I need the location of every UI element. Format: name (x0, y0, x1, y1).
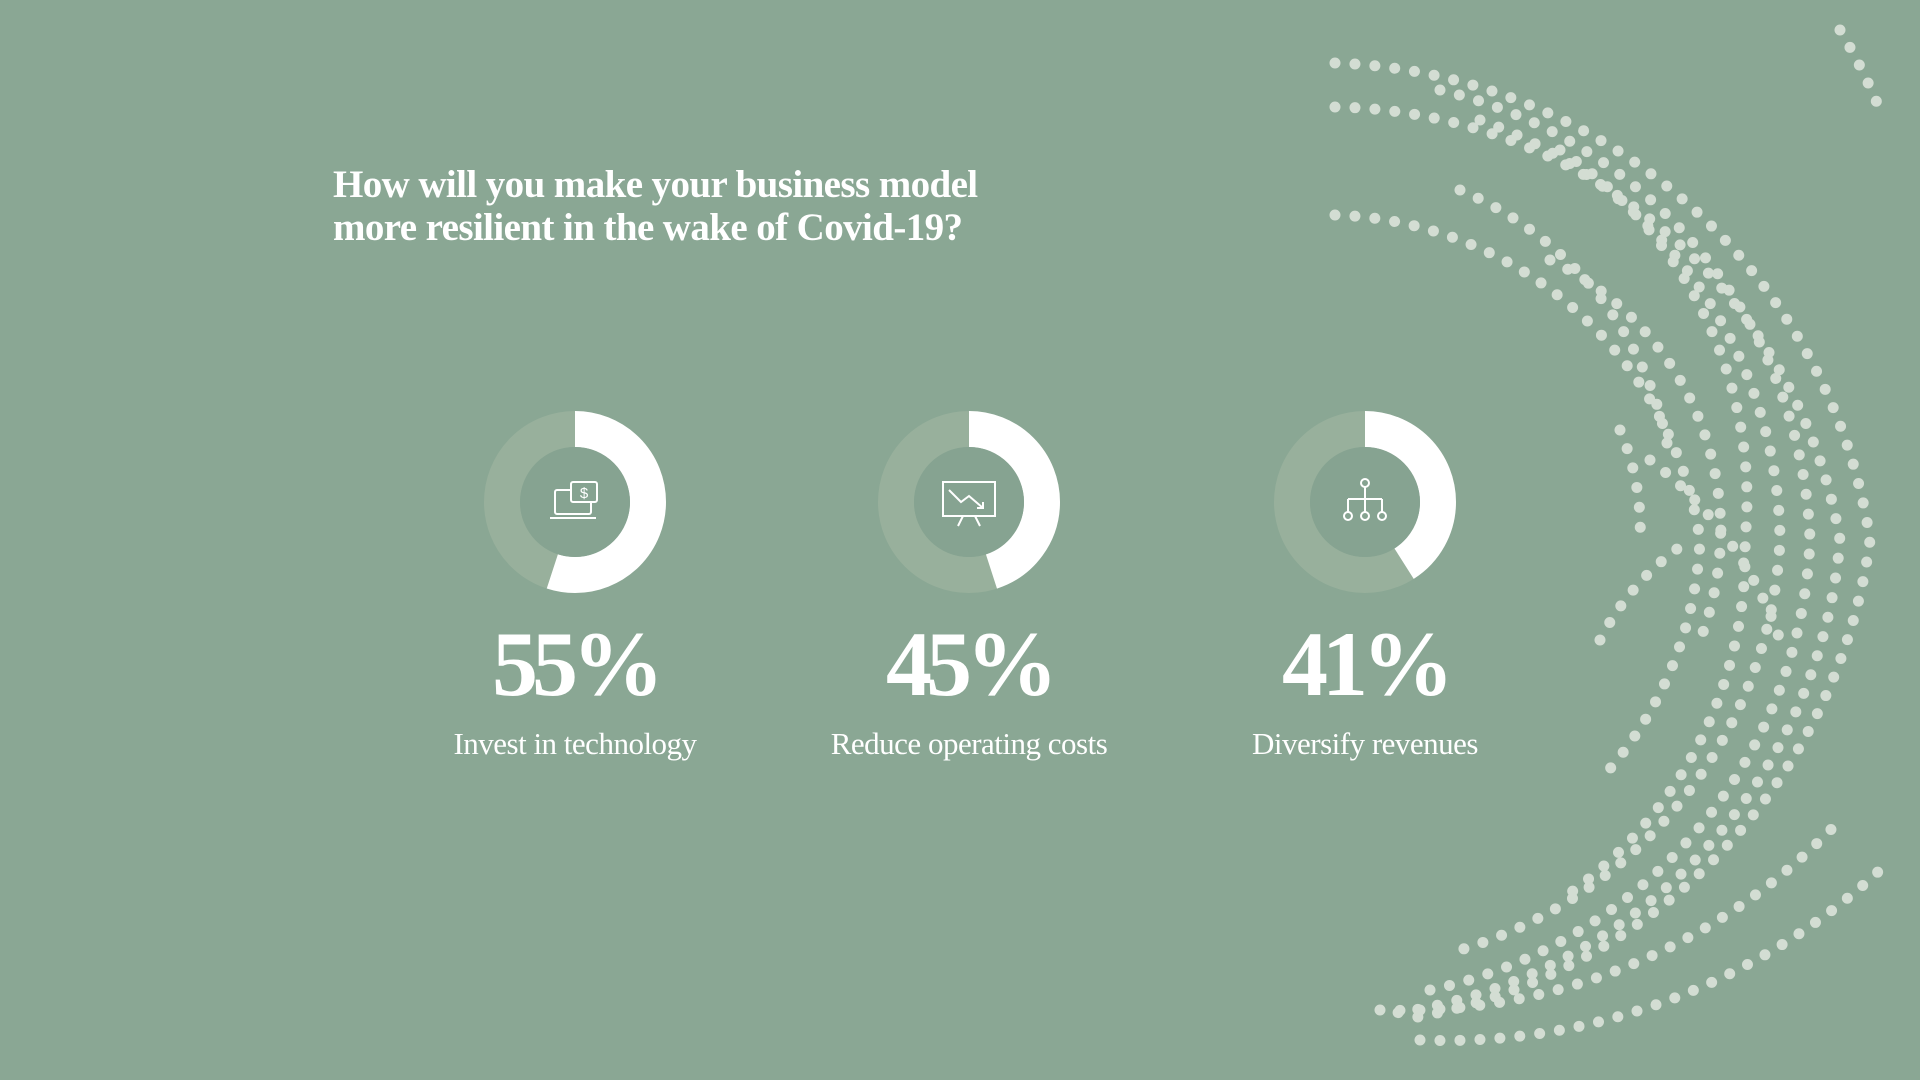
donut chart 55%: $ (580, 485, 589, 502)
donut chart 45% (878, 411, 1060, 593)
stat: diversify revenues (1252, 411, 1478, 761)
stat: reduce operating costs: Reduce operating costs (831, 726, 1107, 761)
stat: reduce operating costs (831, 411, 1107, 761)
stat: reduce operating costs: 45% (886, 613, 1052, 715)
donut chart 55% (484, 411, 666, 593)
stat: invest in technology: Invest in technology (453, 726, 697, 761)
title: How will you make your business model (333, 163, 978, 206)
title: more resilient in the wake of Covid-19? (333, 206, 962, 249)
stat: diversify revenues: Diversify revenues (1252, 726, 1478, 761)
stat: diversify revenues: 41% (1282, 613, 1448, 715)
stat: invest in technology (453, 411, 697, 761)
title (333, 163, 978, 249)
donut chart 41% (1274, 411, 1456, 593)
stat: invest in technology: 55% (492, 613, 658, 715)
